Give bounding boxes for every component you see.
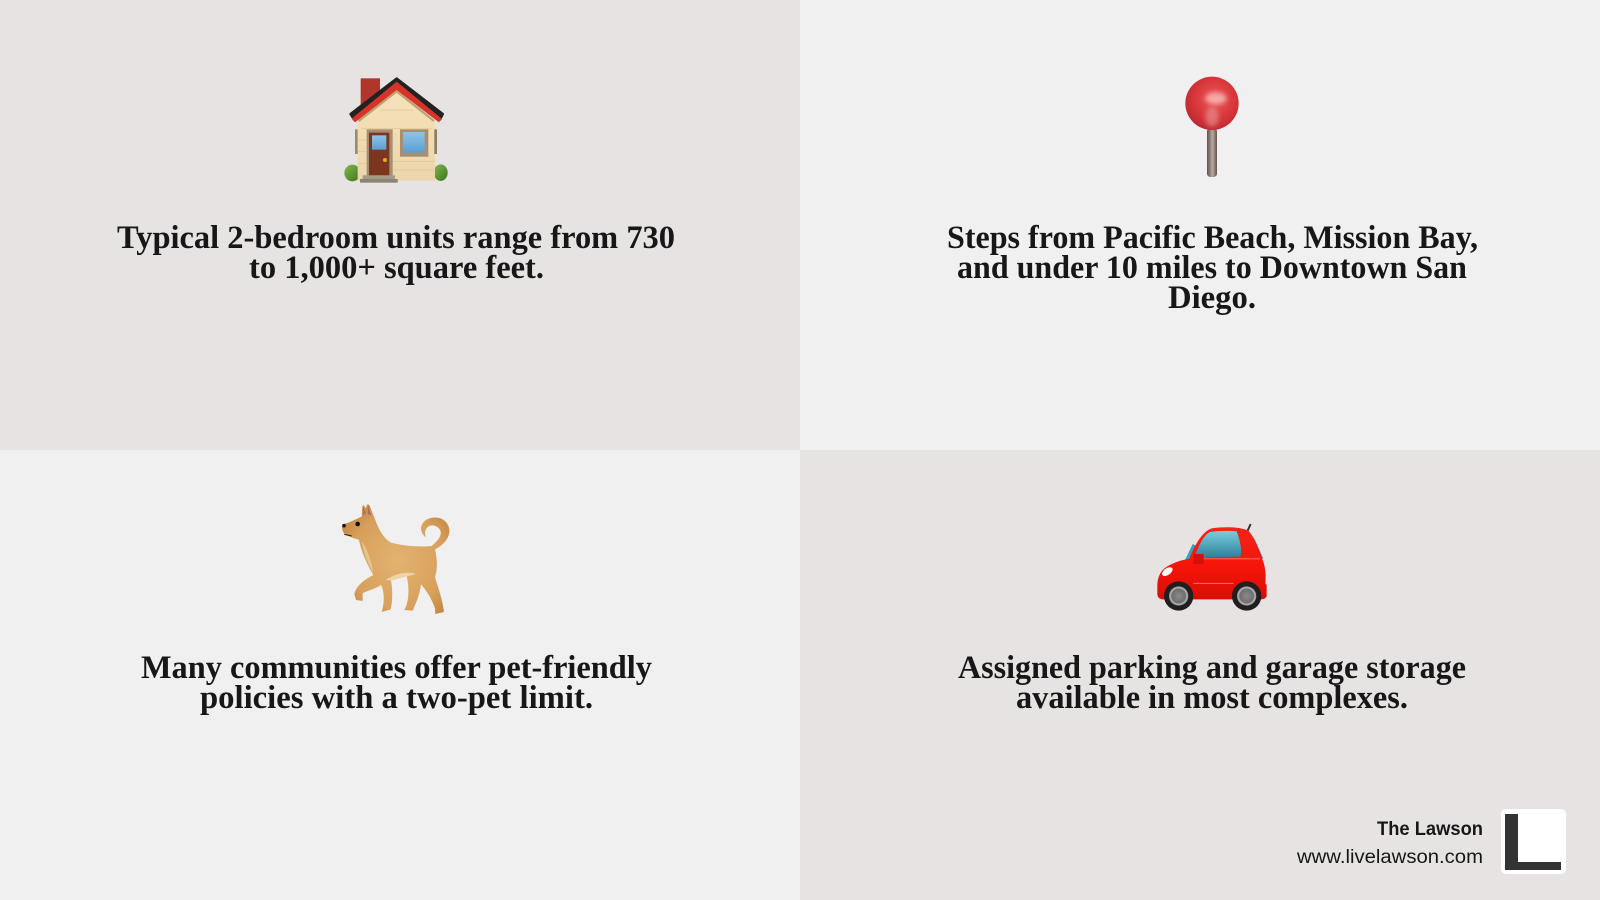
logo (1501, 809, 1566, 874)
panel: location (800, 0, 1600, 450)
text: unit size: Typical 2-bedroom units range from 730 (117, 220, 675, 256)
brand name: The Lawson (1377, 819, 1483, 840)
text: location: and under 10 miles to Downtown San (957, 250, 1467, 286)
text: location: Steps from Pacific Beach, Mission Bay, (947, 220, 1478, 256)
icon: dog (342, 504, 449, 614)
website: www.livelawson.com (1296, 847, 1483, 868)
brand footer (1296, 809, 1566, 874)
text: parking: available in most complexes. (1016, 680, 1408, 716)
text: pets: Many communities offer pet-friendly (141, 650, 652, 686)
text: pets (141, 650, 652, 716)
panel: pets (0, 450, 800, 900)
text: parking: Assigned parking and garage storage (958, 650, 1466, 686)
panel: unit size (0, 0, 800, 450)
icon: car (1157, 524, 1267, 611)
icon: house (344, 78, 448, 183)
icon: round pushpin (1185, 77, 1239, 177)
text: location (947, 220, 1478, 316)
panel: parking (800, 450, 1600, 900)
text: pets: policies with a two-pet limit. (200, 680, 593, 716)
text: parking (958, 650, 1466, 716)
text: location: Diego. (1168, 280, 1256, 316)
text: unit size (117, 220, 675, 286)
text: unit size: to 1,000+ square feet. (249, 250, 544, 286)
